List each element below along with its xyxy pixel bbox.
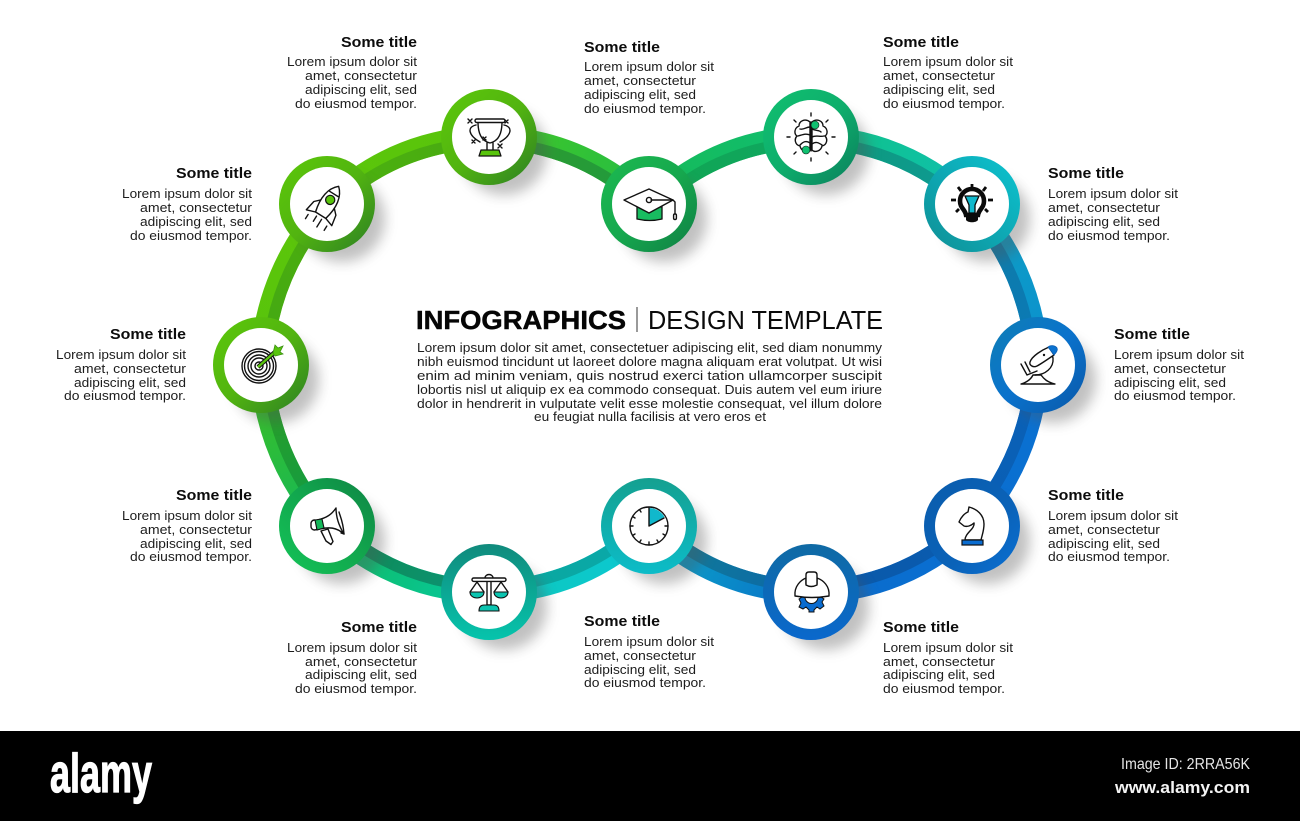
text block: scales: amet, consectetur [305, 654, 418, 669]
text block: helmet: adipiscing elit, sed [883, 667, 995, 682]
icon: chess knight [959, 507, 984, 545]
segment: target to rocket [261, 204, 332, 367]
node: clock [601, 478, 707, 584]
text block: knight: amet, consectetur [1048, 522, 1161, 537]
text block: knight: do eiusmod tempor. [1048, 549, 1170, 564]
text block: graduation cap: Lorem ipsum dolor sit [584, 59, 714, 74]
text block: rocket: adipiscing elit, sed [140, 214, 252, 229]
text block: graduation cap: adipiscing elit, sed [584, 87, 696, 102]
text block: graduation cap: do eiusmod tempor. [584, 101, 706, 116]
center description text [417, 340, 883, 424]
icon: megaphone [311, 508, 344, 544]
center description text: lobortis nisl ut aliquip ex ea commodo consequat. Duis autem vel eum iriure [417, 382, 882, 397]
text block: megaphone: do eiusmod tempor. [130, 549, 252, 564]
text block: brain [883, 34, 1013, 111]
segment: scales to megaphone [327, 521, 491, 592]
node: brain [763, 89, 869, 195]
text block: target: adipiscing elit, sed [74, 375, 186, 390]
text block: trophy: adipiscing elit, sed [305, 82, 417, 97]
icon: clock [630, 507, 668, 545]
text block: target: Lorem ipsum dolor sit [56, 347, 186, 362]
segment: bulb to microscope [967, 204, 1038, 367]
icon: target with arrow [242, 345, 283, 383]
text block: graduation cap: Some title [584, 39, 660, 56]
text block: light bulb: Lorem ipsum dolor sit [1048, 186, 1178, 201]
center description text: Lorem ipsum dolor sit amet, consectetuer adipiscing elit, sed diam nonummy [417, 340, 883, 355]
footer image id: Image ID: 2RRA56K [1121, 756, 1250, 773]
node: megaphone [279, 478, 385, 584]
icon: trophy [468, 119, 510, 156]
icon: light bulb [951, 184, 993, 222]
text block: megaphone: Lorem ipsum dolor sit [122, 508, 252, 523]
text block: knight: adipiscing elit, sed [1048, 536, 1160, 551]
text block: brain: amet, consectetur [883, 68, 996, 83]
text block: microscope [1114, 326, 1244, 403]
icon: balance scales [470, 574, 508, 611]
node: chess knight [924, 478, 1030, 584]
text block: rocket: Lorem ipsum dolor sit [122, 186, 252, 201]
text block: light bulb: do eiusmod tempor. [1048, 228, 1170, 243]
node: helmet and gear [763, 544, 869, 650]
text block: trophy [287, 34, 418, 111]
text block: microscope: do eiusmod tempor. [1114, 388, 1236, 403]
text block: clock [584, 613, 714, 690]
text block: helmet [883, 619, 1013, 696]
text block: light bulb: adipiscing elit, sed [1048, 214, 1160, 229]
text block: scales: adipiscing elit, sed [305, 667, 417, 682]
node: rocket [279, 156, 385, 262]
text block: clock: amet, consectetur [584, 648, 697, 663]
text block: clock: do eiusmod tempor. [584, 675, 706, 690]
text block: megaphone [122, 487, 253, 564]
segment: rocket to trophy [327, 137, 491, 209]
text block: clock: Lorem ipsum dolor sit [584, 634, 714, 649]
text block: microscope: Lorem ipsum dolor sit [1114, 347, 1244, 362]
node: trophy [441, 89, 547, 195]
text block: scales: Lorem ipsum dolor sit [287, 640, 417, 655]
text block: rocket: amet, consectetur [140, 200, 253, 215]
footer bar [0, 731, 1300, 821]
segment: trophy to cap [487, 137, 649, 209]
text block: megaphone: amet, consectetur [140, 522, 253, 537]
text block: helmet: do eiusmod tempor. [883, 681, 1005, 696]
text block: rocket: do eiusmod tempor. [130, 228, 252, 243]
text block: trophy: do eiusmod tempor. [295, 96, 417, 111]
icon: microscope [1021, 346, 1057, 384]
node: target [213, 317, 319, 423]
footer website: www.alamy.com [1114, 778, 1250, 797]
node: microscope [990, 317, 1096, 423]
text block: brain: Lorem ipsum dolor sit [883, 54, 1013, 69]
text block: light bulb: amet, consectetur [1048, 200, 1161, 215]
segment: brain to bulb [809, 137, 972, 209]
text block: brain: adipiscing elit, sed [883, 82, 995, 97]
text block: clock: adipiscing elit, sed [584, 662, 696, 677]
text block: scales: Some title [341, 619, 417, 636]
segment: clock to scales [487, 521, 649, 592]
text block: brain: do eiusmod tempor. [883, 96, 1005, 111]
footer logo: alamy [50, 742, 152, 804]
segment: megaphone to target [261, 363, 332, 526]
segment: microscope to knight [967, 363, 1038, 526]
text block: scales [287, 619, 418, 696]
text block: light bulb [1048, 165, 1178, 243]
title: light words: DESIGN TEMPLATE [648, 305, 883, 335]
center description text: nibh euismod tincidunt ut laoreet dolore magna aliquam erat volutpat. Ut wisi [417, 354, 882, 369]
segment: cap to brain [649, 137, 813, 209]
node: light bulb [924, 156, 1030, 262]
text block: knight [1048, 487, 1178, 564]
text block: graduation cap: amet, consectetur [584, 73, 697, 88]
text block: target: do eiusmod tempor. [64, 388, 186, 403]
text block: microscope: Some title [1114, 326, 1190, 343]
center description text: eu feugiat nulla facilisis at vero eros et [534, 409, 766, 424]
segment: knight to helmet [809, 521, 972, 592]
node: scales [441, 544, 547, 650]
segment: helmet to clock [649, 521, 813, 592]
text block: trophy: Lorem ipsum dolor sit [287, 54, 417, 69]
text block: brain: Some title [883, 34, 959, 51]
node: graduation cap [601, 156, 707, 262]
text block: knight: Lorem ipsum dolor sit [1048, 508, 1178, 523]
title: bold word: INFOGRAPHICS [416, 305, 626, 335]
center description text: enim ad minim veniam, quis nostrud exerci tation ullamcorper suscipit [417, 368, 882, 383]
icon: graduation cap [624, 189, 676, 220]
text block: helmet: Lorem ipsum dolor sit [883, 640, 1013, 655]
text block: knight: Some title [1048, 487, 1124, 504]
text block: megaphone: adipiscing elit, sed [140, 536, 252, 551]
icon: rocket [302, 178, 351, 233]
text block: helmet: Some title [883, 619, 959, 636]
text block: light bulb: Some title [1048, 165, 1124, 182]
title separator [636, 307, 638, 332]
text block: target: Some title [110, 326, 186, 343]
ring track: curved two-tone segments [261, 137, 1038, 592]
text block: clock: Some title [584, 613, 660, 630]
text block: microscope: amet, consectetur [1114, 361, 1227, 376]
main title [416, 305, 883, 335]
icon: brain [787, 113, 835, 161]
text block: megaphone: Some title [176, 487, 252, 504]
text block: rocket [122, 165, 253, 243]
text block: rocket: Some title [176, 165, 252, 182]
text block: target: amet, consectetur [74, 361, 187, 376]
text block: trophy: amet, consectetur [305, 68, 418, 83]
text block: trophy: Some title [341, 34, 417, 51]
text block: scales: do eiusmod tempor. [295, 681, 417, 696]
text block: graduation cap [584, 39, 714, 116]
text block: target [56, 326, 187, 403]
text block: microscope: adipiscing elit, sed [1114, 375, 1226, 390]
icon: helmet and gear [795, 572, 829, 612]
text block: helmet: amet, consectetur [883, 654, 996, 669]
center description text: dolor in hendrerit in vulputate velit esse molestie consequat, vel illum dolore [417, 396, 882, 411]
